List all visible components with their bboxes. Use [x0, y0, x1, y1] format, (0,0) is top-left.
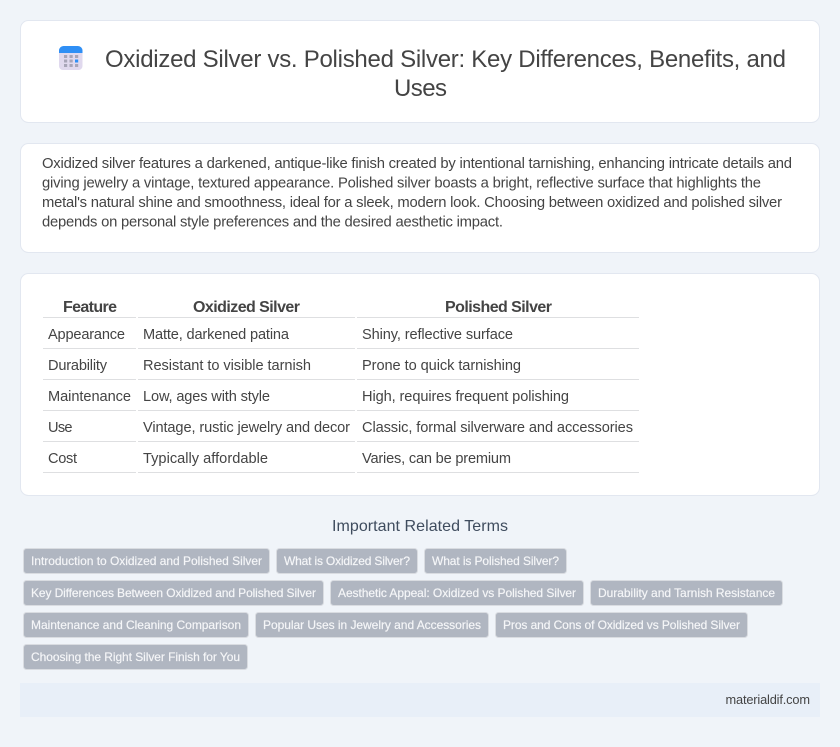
table row: use: Classic, formal silverware and accessories	[362, 420, 633, 436]
related terms tags	[24, 548, 782, 670]
text block: introduction: metal's natural shine and smoothness, ideal for a sleek, modern look. Choosing between oxidized and polished silver	[42, 195, 782, 211]
text block: introduction: depends on personal style preferences and the desired aesthetic impact.	[42, 214, 503, 230]
table row: maintenance: Maintenance	[48, 389, 131, 405]
table row: maintenance: High, requires frequent polishing	[362, 389, 569, 405]
table row: appearance: Shiny, reflective surface	[362, 327, 513, 343]
tag	[590, 580, 782, 606]
table header row	[43, 299, 639, 318]
heading: important related terms: Important Related Terms	[332, 518, 508, 535]
tag	[24, 548, 270, 574]
tag: What is Polished Silver?	[432, 554, 559, 568]
table row: cost: Varies, can be premium	[362, 451, 511, 467]
tag	[24, 644, 248, 670]
panel: comparison table	[20, 274, 820, 496]
table row: appearance: Matte, darkened patina	[143, 327, 290, 343]
tag: Key Differences Between Oxidized and Polished Silver	[31, 586, 316, 600]
tag: Pros and Cons of Oxidized vs Polished Silver	[503, 618, 740, 632]
tag: What is Oxidized Silver?	[284, 554, 410, 568]
table row: cost: Cost	[48, 451, 77, 467]
title: Oxidized Silver vs. Polished Silver: Key Differences, Benefits, and	[105, 46, 786, 73]
title: Uses	[394, 75, 447, 102]
table row: use	[43, 420, 639, 442]
table row: durability	[43, 358, 639, 380]
table row: cost: Typically affordable	[143, 451, 268, 467]
tag	[330, 580, 584, 606]
footer bar: materialdif.com	[726, 692, 810, 707]
table row: appearance	[43, 327, 639, 348]
tag: Choosing the Right Silver Finish for You	[31, 650, 240, 664]
title	[105, 46, 786, 102]
tag	[24, 612, 248, 638]
table row: durability: Resistant to visible tarnish	[143, 358, 311, 374]
table header row: Feature	[63, 299, 117, 316]
table header row: Polished Silver	[445, 299, 552, 316]
footer bar	[20, 683, 820, 717]
panel: title header	[20, 20, 820, 122]
table row: maintenance: Low, ages with style	[143, 389, 270, 405]
tag: Introduction to Oxidized and Polished Silver	[31, 554, 262, 568]
tag	[496, 612, 748, 638]
table row: durability: Prone to quick tarnishing	[362, 358, 521, 374]
table row: maintenance	[43, 389, 639, 410]
table row: durability: Durability	[48, 358, 108, 374]
tag	[256, 612, 488, 638]
panel: introduction paragraph	[20, 144, 820, 252]
table row: use: Use	[48, 420, 72, 436]
table row: appearance: Appearance	[48, 327, 125, 343]
text block: introduction: Oxidized silver features a darkened, antique-like finish created by intentional tarnishing, enhancing intricate details and	[42, 156, 792, 172]
tag	[24, 580, 324, 606]
tag: Popular Uses in Jewelry and Accessories	[263, 618, 481, 632]
text block: introduction	[42, 156, 792, 230]
tag: Aesthetic Appeal: Oxidized vs Polished Silver	[338, 586, 576, 600]
tag: Maintenance and Cleaning Comparison	[31, 618, 241, 632]
text block: introduction: giving jewelry a vintage, textured appearance. Polished silver boasts a bright, reflective surface that highlights the	[42, 176, 761, 192]
table row: cost	[43, 451, 639, 472]
tag: Durability and Tarnish Resistance	[598, 586, 775, 600]
table row: use: Vintage, rustic jewelry and decor	[143, 420, 350, 436]
table header row: Oxidized Silver	[193, 299, 300, 316]
icon: calendar	[59, 46, 82, 70]
tag	[276, 548, 418, 574]
tag	[424, 548, 566, 574]
